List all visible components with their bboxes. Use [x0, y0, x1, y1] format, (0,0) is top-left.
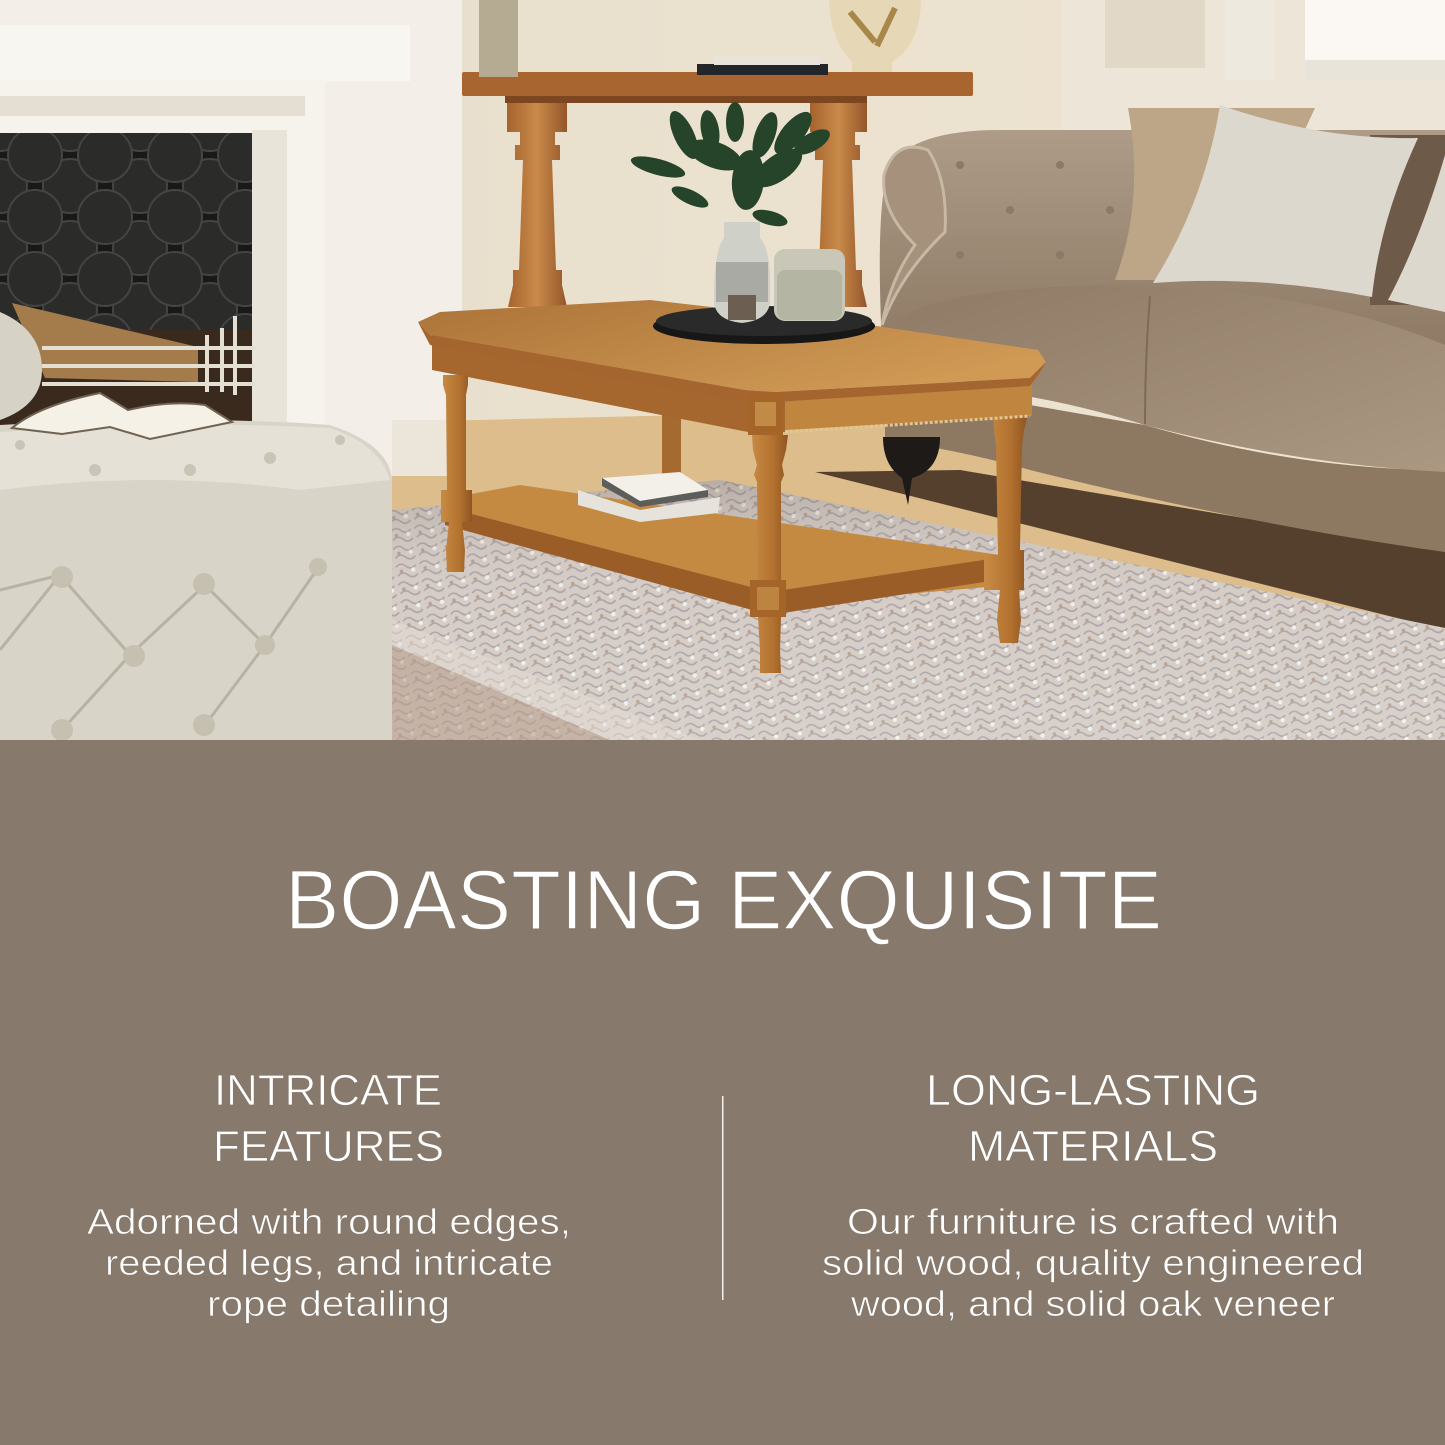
body text: wood, and solid oak veneer	[850, 1283, 1335, 1324]
rug	[392, 480, 1445, 740]
apron	[432, 330, 785, 432]
right console leg	[810, 103, 867, 307]
ottoman	[0, 312, 392, 741]
column: long-lasting materials	[822, 1066, 1364, 1324]
heading	[926, 1066, 1260, 1171]
sofa foot	[883, 437, 940, 505]
firebox tiles	[0, 133, 252, 340]
coffee table	[418, 300, 1046, 673]
table top	[418, 300, 1046, 392]
column: intricate features	[87, 1066, 571, 1324]
cushions	[1115, 108, 1315, 280]
firewood	[12, 303, 198, 382]
far leg	[662, 415, 681, 475]
brass fender rails	[42, 316, 255, 395]
shelf books	[578, 472, 720, 522]
body text: Our furniture is crafted with	[847, 1201, 1339, 1242]
tray	[653, 306, 875, 344]
arm cushion	[0, 312, 42, 420]
sofa back	[880, 130, 1445, 360]
console decor: vase, books, glass	[479, 0, 921, 77]
heading: LONG-LASTING	[926, 1066, 1260, 1115]
open book	[12, 393, 232, 439]
title: BOASTING EXQUISITE	[285, 853, 1162, 947]
photo: living room scene	[0, 0, 1445, 741]
panel: text background	[0, 740, 1445, 1445]
heading: FEATURES	[213, 1122, 444, 1171]
right leg	[984, 418, 1027, 643]
rope trim	[785, 416, 1030, 432]
rosettes	[748, 393, 786, 617]
seat	[899, 285, 1445, 472]
body text: rope detailing	[207, 1283, 450, 1324]
console table	[462, 72, 973, 307]
body text: solid wood, quality engineered	[822, 1242, 1364, 1283]
glass vase and plant	[629, 102, 834, 323]
candle jar	[774, 249, 845, 321]
body text	[822, 1201, 1364, 1324]
heading: INTRICATE	[214, 1066, 442, 1115]
front leg	[750, 435, 788, 673]
body text: reeded legs, and intricate	[105, 1242, 553, 1283]
lower shelf	[445, 485, 1010, 605]
window and wall panel	[1062, 0, 1445, 135]
dark floor under sofa	[815, 470, 1445, 630]
body text	[87, 1201, 571, 1324]
heading: MATERIALS	[968, 1122, 1218, 1171]
left leg	[441, 375, 472, 572]
body text: Adorned with round edges,	[87, 1201, 571, 1242]
divider	[722, 1096, 724, 1300]
sofa	[880, 105, 1445, 552]
left console leg	[507, 103, 567, 307]
wall background	[0, 0, 1445, 520]
fireplace surround	[0, 0, 462, 476]
floor	[392, 410, 1445, 640]
heading	[213, 1066, 444, 1171]
rolled arm	[882, 147, 945, 325]
sofa base	[885, 405, 1445, 552]
